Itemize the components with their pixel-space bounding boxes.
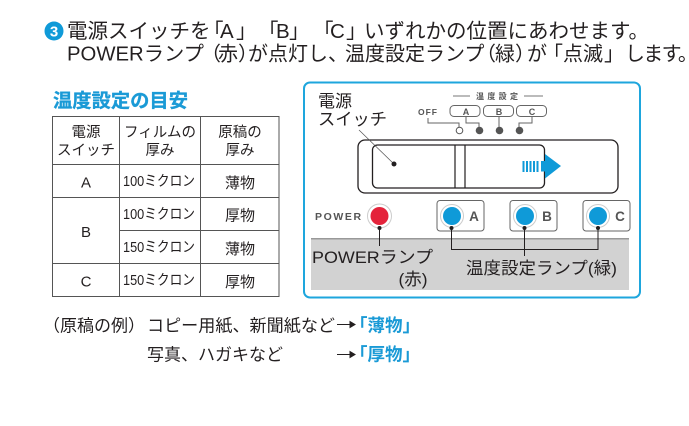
label: power lamp red: (赤) — [398, 270, 428, 289]
instruction line 1: C — [330, 20, 345, 43]
table header row: フィルムの — [124, 125, 196, 141]
button A: A — [469, 209, 479, 224]
instruction line 2: （ — [476, 42, 496, 66]
label: power switch: 電源 — [318, 92, 352, 111]
table heading: 温度設定の目安 — [53, 90, 188, 112]
arrow: slide direction — [522, 154, 561, 178]
temperature setting indicator — [418, 91, 546, 134]
instruction line 2: 点滅 — [563, 42, 603, 66]
table header row: 原稿の — [218, 124, 262, 141]
label: temperature lamp green: 温度設定ランプ(緑) — [466, 259, 617, 278]
example: thick: 写真、ハガキなど — [147, 346, 283, 364]
instruction line 2: 赤 — [218, 42, 238, 66]
table body rows: 150ミクロン — [123, 272, 195, 289]
icon: step number 3: 3 — [50, 24, 58, 40]
instruction line 2: 温度設定ランプ — [345, 42, 484, 66]
instruction line 1: 」 — [236, 20, 256, 43]
example: thin — [43, 316, 420, 336]
instruction line 2: POWERランプ — [67, 44, 204, 66]
arrow: to thick — [337, 352, 355, 358]
table body rows: 100ミクロン — [123, 206, 195, 223]
button C — [583, 200, 630, 231]
button B: B — [542, 209, 552, 224]
icon: step number 3 — [44, 22, 64, 40]
instruction line 2: （ — [201, 42, 221, 66]
button C: C — [615, 209, 625, 224]
temperature setting indicator: C — [529, 107, 536, 117]
table body rows — [81, 173, 255, 291]
instruction line 1: 電源スイッチを — [67, 20, 210, 43]
instruction line 1: いずれかの位置にあわせます。 — [364, 20, 649, 43]
temperature setting indicator: A — [463, 107, 470, 117]
button B — [510, 200, 557, 231]
table header row: 厚み — [146, 143, 174, 159]
power lamp: POWER — [315, 211, 363, 223]
table body rows: 150ミクロン — [123, 239, 195, 256]
leader lines to temperature lamps — [450, 226, 600, 256]
table body rows: C — [81, 274, 92, 290]
table header row — [57, 124, 262, 159]
document examples — [43, 316, 420, 364]
instruction line 1: A — [220, 20, 234, 43]
gray label band — [311, 238, 629, 290]
step heading — [44, 20, 689, 66]
temperature setting indicator: OFF — [418, 107, 438, 117]
instruction line 1: 「 — [203, 20, 224, 43]
table header row: スイッチ — [57, 143, 115, 159]
table body rows: B — [81, 224, 91, 241]
power lamp — [315, 204, 392, 246]
instruction line 2: 「 — [543, 42, 563, 66]
panel: device diagram — [304, 82, 640, 298]
table header row: 厚み — [226, 143, 254, 159]
instruction line 2: 緑 — [495, 42, 515, 66]
instruction line 1: B — [276, 20, 290, 43]
label: power switch — [318, 92, 387, 129]
button A — [437, 200, 484, 231]
temperature setting indicator: B — [496, 107, 503, 117]
power switch slider — [358, 130, 618, 193]
table body rows: 薄物 — [225, 175, 255, 192]
example: thin: コピー用紙、新聞紙など — [147, 316, 335, 336]
table body rows: 100ミクロン — [123, 173, 195, 190]
table body rows: 厚物 — [225, 274, 255, 291]
instruction line 2: ） — [238, 42, 258, 66]
arrow: to thin — [337, 322, 355, 328]
instruction line 1: 「 — [313, 20, 334, 43]
instruction line 1: 」 — [289, 20, 310, 43]
table header row: 電源 — [72, 124, 101, 141]
example: thin: 「薄物」 — [350, 316, 420, 336]
example: thick: 「厚物」 — [350, 344, 420, 364]
instruction line 2: 」 — [604, 44, 624, 66]
table body rows: 厚物 — [225, 208, 255, 224]
instruction line 1: 「 — [258, 20, 278, 43]
instruction line 2: が点灯し、 — [248, 42, 348, 66]
instruction line 2: が — [527, 42, 547, 66]
instruction line 1: 」 — [346, 20, 366, 43]
temperature guide table — [52, 116, 279, 296]
label: power lamp red: POWERランプ — [312, 248, 433, 267]
example: thick — [147, 344, 420, 364]
temperature setting indicator: 温度設定 — [476, 91, 518, 101]
label: power lamp red — [312, 248, 433, 289]
label: power switch: スイッチ — [318, 110, 387, 129]
example: thin: （原稿の例） — [43, 316, 145, 336]
instruction line 2: ） — [515, 42, 535, 66]
table body rows: 薄物 — [225, 241, 255, 258]
table body rows: A — [81, 174, 91, 192]
